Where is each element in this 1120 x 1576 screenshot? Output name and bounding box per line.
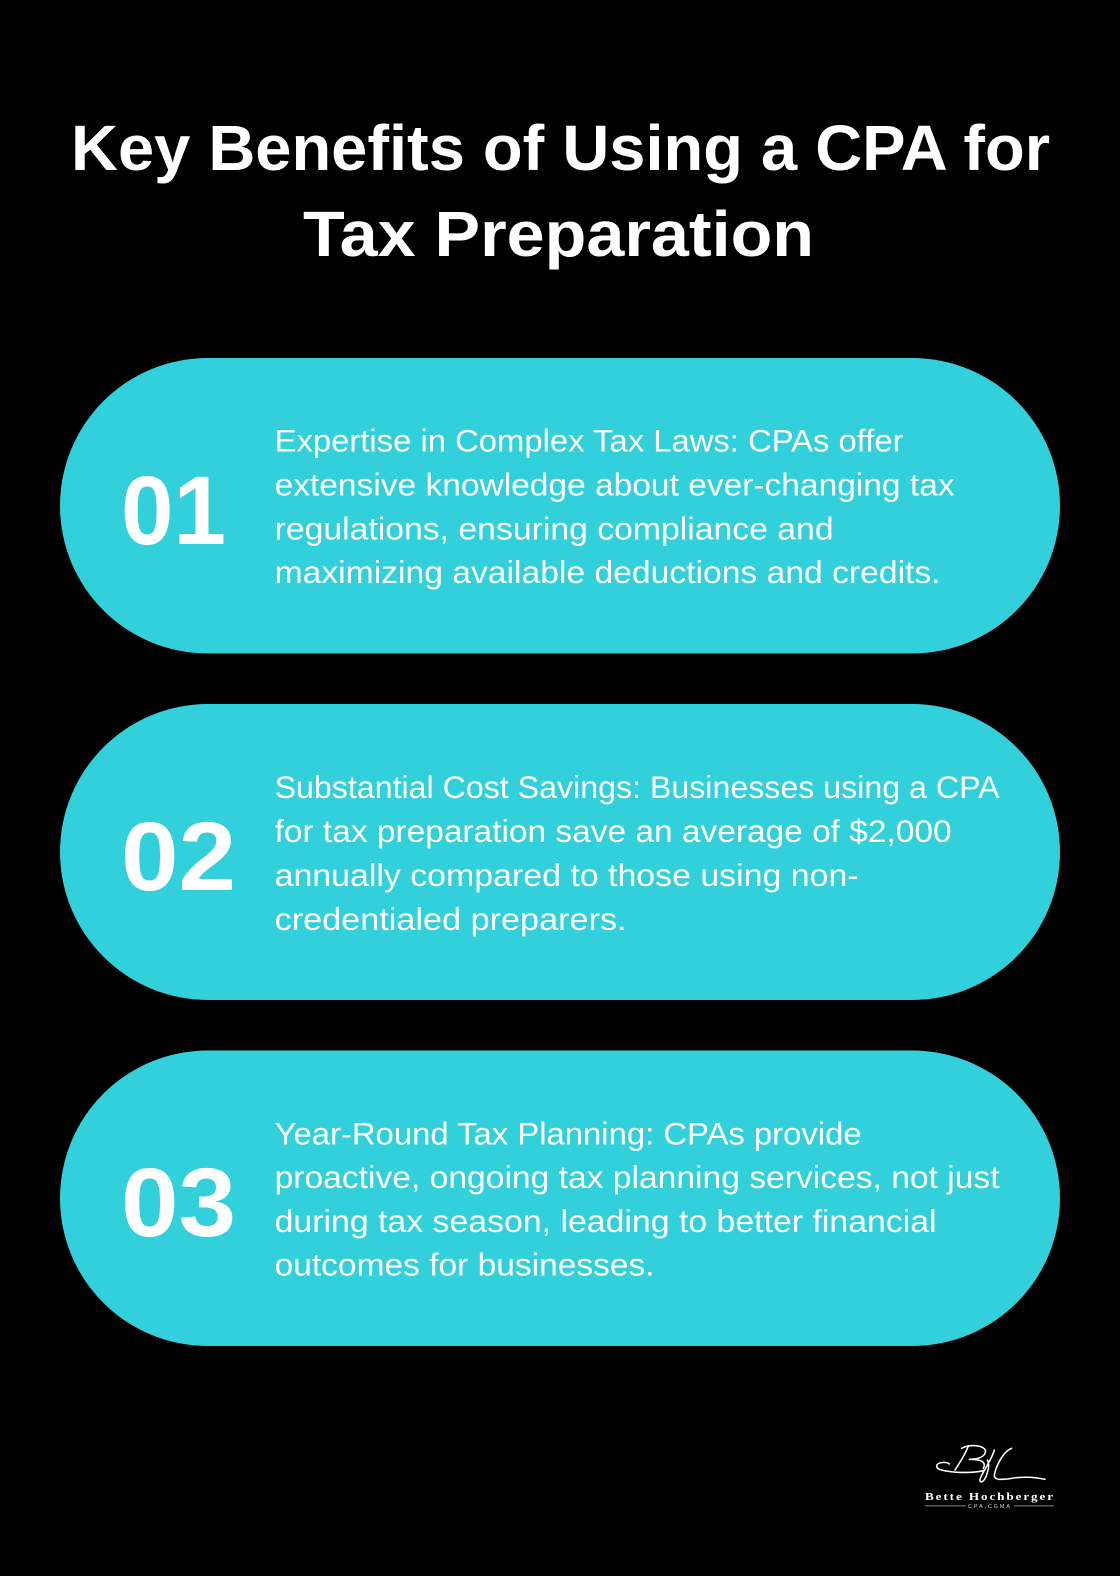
text block: expertise: extensive knowledge about ever-changing tax [275, 467, 955, 503]
number 02: 02 [121, 802, 236, 911]
text block: cost savings [275, 769, 1001, 937]
text block: tax planning [275, 1115, 1000, 1283]
logo credentials: CPA,CGMA [968, 1504, 1010, 1510]
text block: tax planning: during tax season, leading to better financial [275, 1203, 937, 1239]
logo: Bette Hochberger signature [925, 1446, 1055, 1510]
text block: cost savings: credentialed preparers. [275, 901, 627, 937]
text block: expertise: Expertise in Complex Tax Laws: CPAs offer [275, 423, 904, 459]
text block: cost savings: for tax preparation save an average of $2,000 [275, 813, 952, 849]
number 01: 01 [121, 456, 226, 565]
text block: expertise: regulations, ensuring compliance and [275, 510, 834, 546]
text block: cost savings: annually compared to those using non- [275, 857, 859, 893]
text block: cost savings: Substantial Cost Savings: Businesses using a CPA [275, 769, 1001, 805]
icon: BH signature [937, 1446, 1045, 1482]
text block: expertise: maximizing available deductions and credits. [275, 554, 941, 590]
title: Key Benefits of Using a CPA for [71, 112, 1050, 184]
panel: year-round tax planning [60, 1050, 1060, 1346]
text block: expertise [275, 423, 955, 590]
number 03: 03 [121, 1148, 236, 1257]
text block: tax planning: Year-Round Tax Planning: CPAs provide [275, 1115, 862, 1151]
title [71, 112, 1050, 270]
panel: expertise in complex tax laws [60, 358, 1060, 654]
logo name: Bette Hochberger [925, 1491, 1055, 1503]
text block: tax planning: proactive, ongoing tax planning services, not just [275, 1159, 1000, 1195]
text block: tax planning: outcomes for businesses. [275, 1247, 655, 1283]
panel: substantial cost savings [60, 704, 1060, 1000]
title: Tax Preparation [303, 198, 814, 270]
